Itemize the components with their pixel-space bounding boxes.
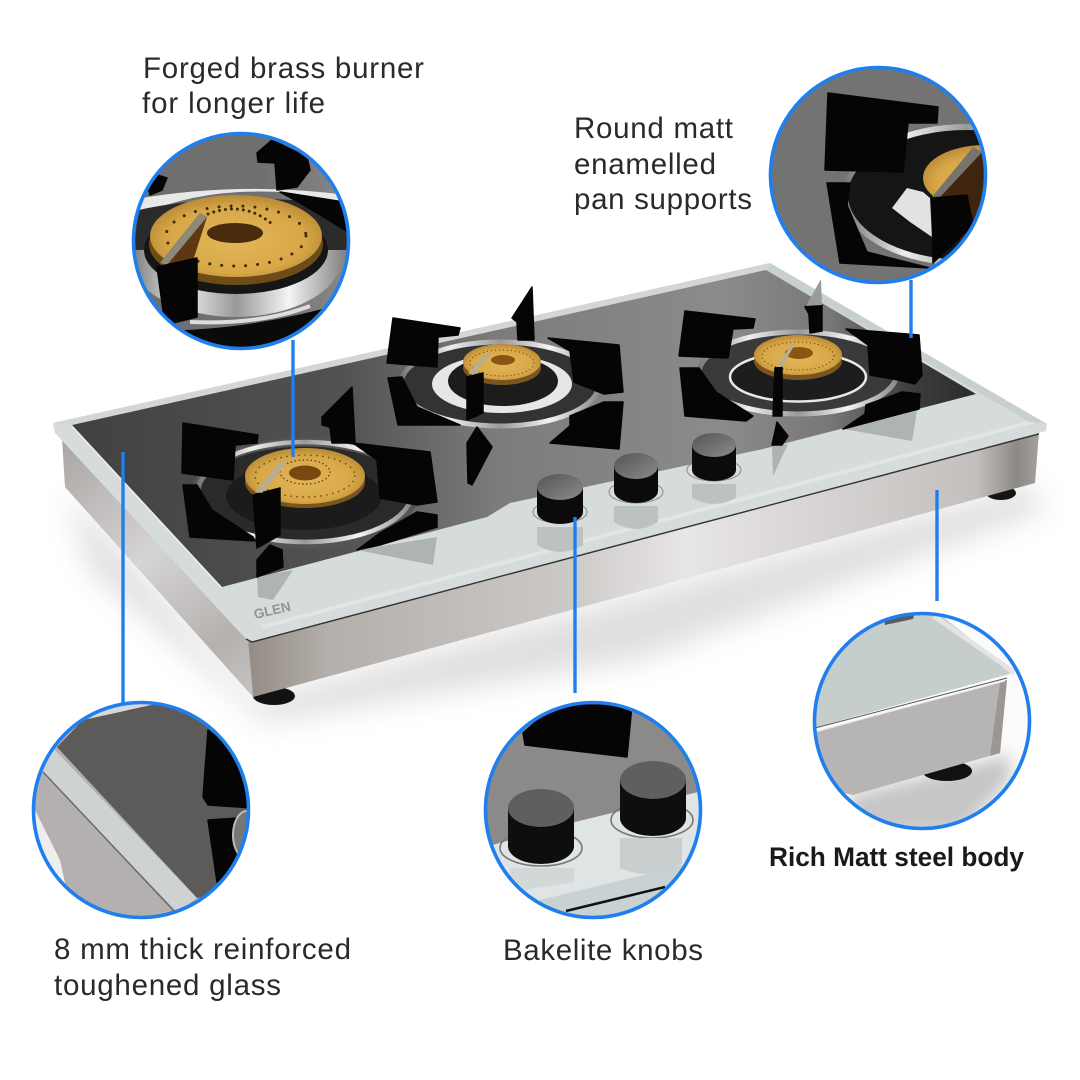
heading: round matt enamelled pan supports [574,112,752,216]
knob 2 [609,453,663,503]
burner ring [401,342,599,426]
brass [923,145,982,196]
gas stove product [53,263,1047,722]
rubber feet [253,486,1016,705]
burner back right [679,279,922,476]
burner ring [196,442,414,544]
heading: forged brass burner [142,52,424,120]
pan support top strip [777,343,794,367]
pan supports [679,305,922,445]
brass burner [245,448,365,508]
burner back middle [387,287,623,485]
heading: round matt enamelled pan supports: Round matt [574,112,733,145]
heading: toughened glass: toughened glass [54,969,281,1002]
grey pan support tip [806,279,822,306]
burner left front [182,387,437,600]
heading: round matt enamelled pan supports: pan supports [574,183,752,216]
pan support reflections [257,537,437,600]
brass burner [463,344,541,385]
knob reflections [537,484,736,552]
heading: rich matt steel body: Rich Matt steel body [769,842,1024,872]
heading: forged brass burner: for longer life [142,87,325,120]
callout circle: pan supports [768,66,988,284]
steel body front side [248,432,1039,697]
callout circle: brass burner [130,130,355,355]
pan supports [182,387,437,577]
steel body left side [62,438,253,697]
pan support top strip [255,460,287,493]
pan supports [387,287,623,485]
callout circle: bakelite knobs [480,698,705,930]
heading: toughened glass [54,933,351,1002]
burner ring [699,332,897,414]
silver bowl [136,250,339,317]
right knob in zoom [610,808,694,838]
knob 1 [533,474,587,524]
heading: round matt enamelled pan supports: enamelled [574,148,716,181]
heading: bakelite knobs: Bakelite knobs [503,934,703,967]
knob 3 [687,433,741,481]
soft shadow under stove [66,485,1045,722]
pan support reflections [772,411,917,476]
ring [847,124,980,264]
brass burner [754,335,842,380]
glass top plate [53,263,1047,642]
heading: toughened glass: 8 mm thick reinforced [54,933,351,966]
callout circle: steel body [810,610,1035,835]
black glass area [72,270,976,587]
control knobs [533,433,741,552]
left knob in zoom [499,836,583,867]
GLEN logo: GLEN [252,599,292,622]
connector lines [123,280,937,704]
heading: forged brass burner: Forged brass burner [143,52,424,85]
pan support top strip [468,352,490,375]
callout circle: toughened glass [28,698,261,923]
